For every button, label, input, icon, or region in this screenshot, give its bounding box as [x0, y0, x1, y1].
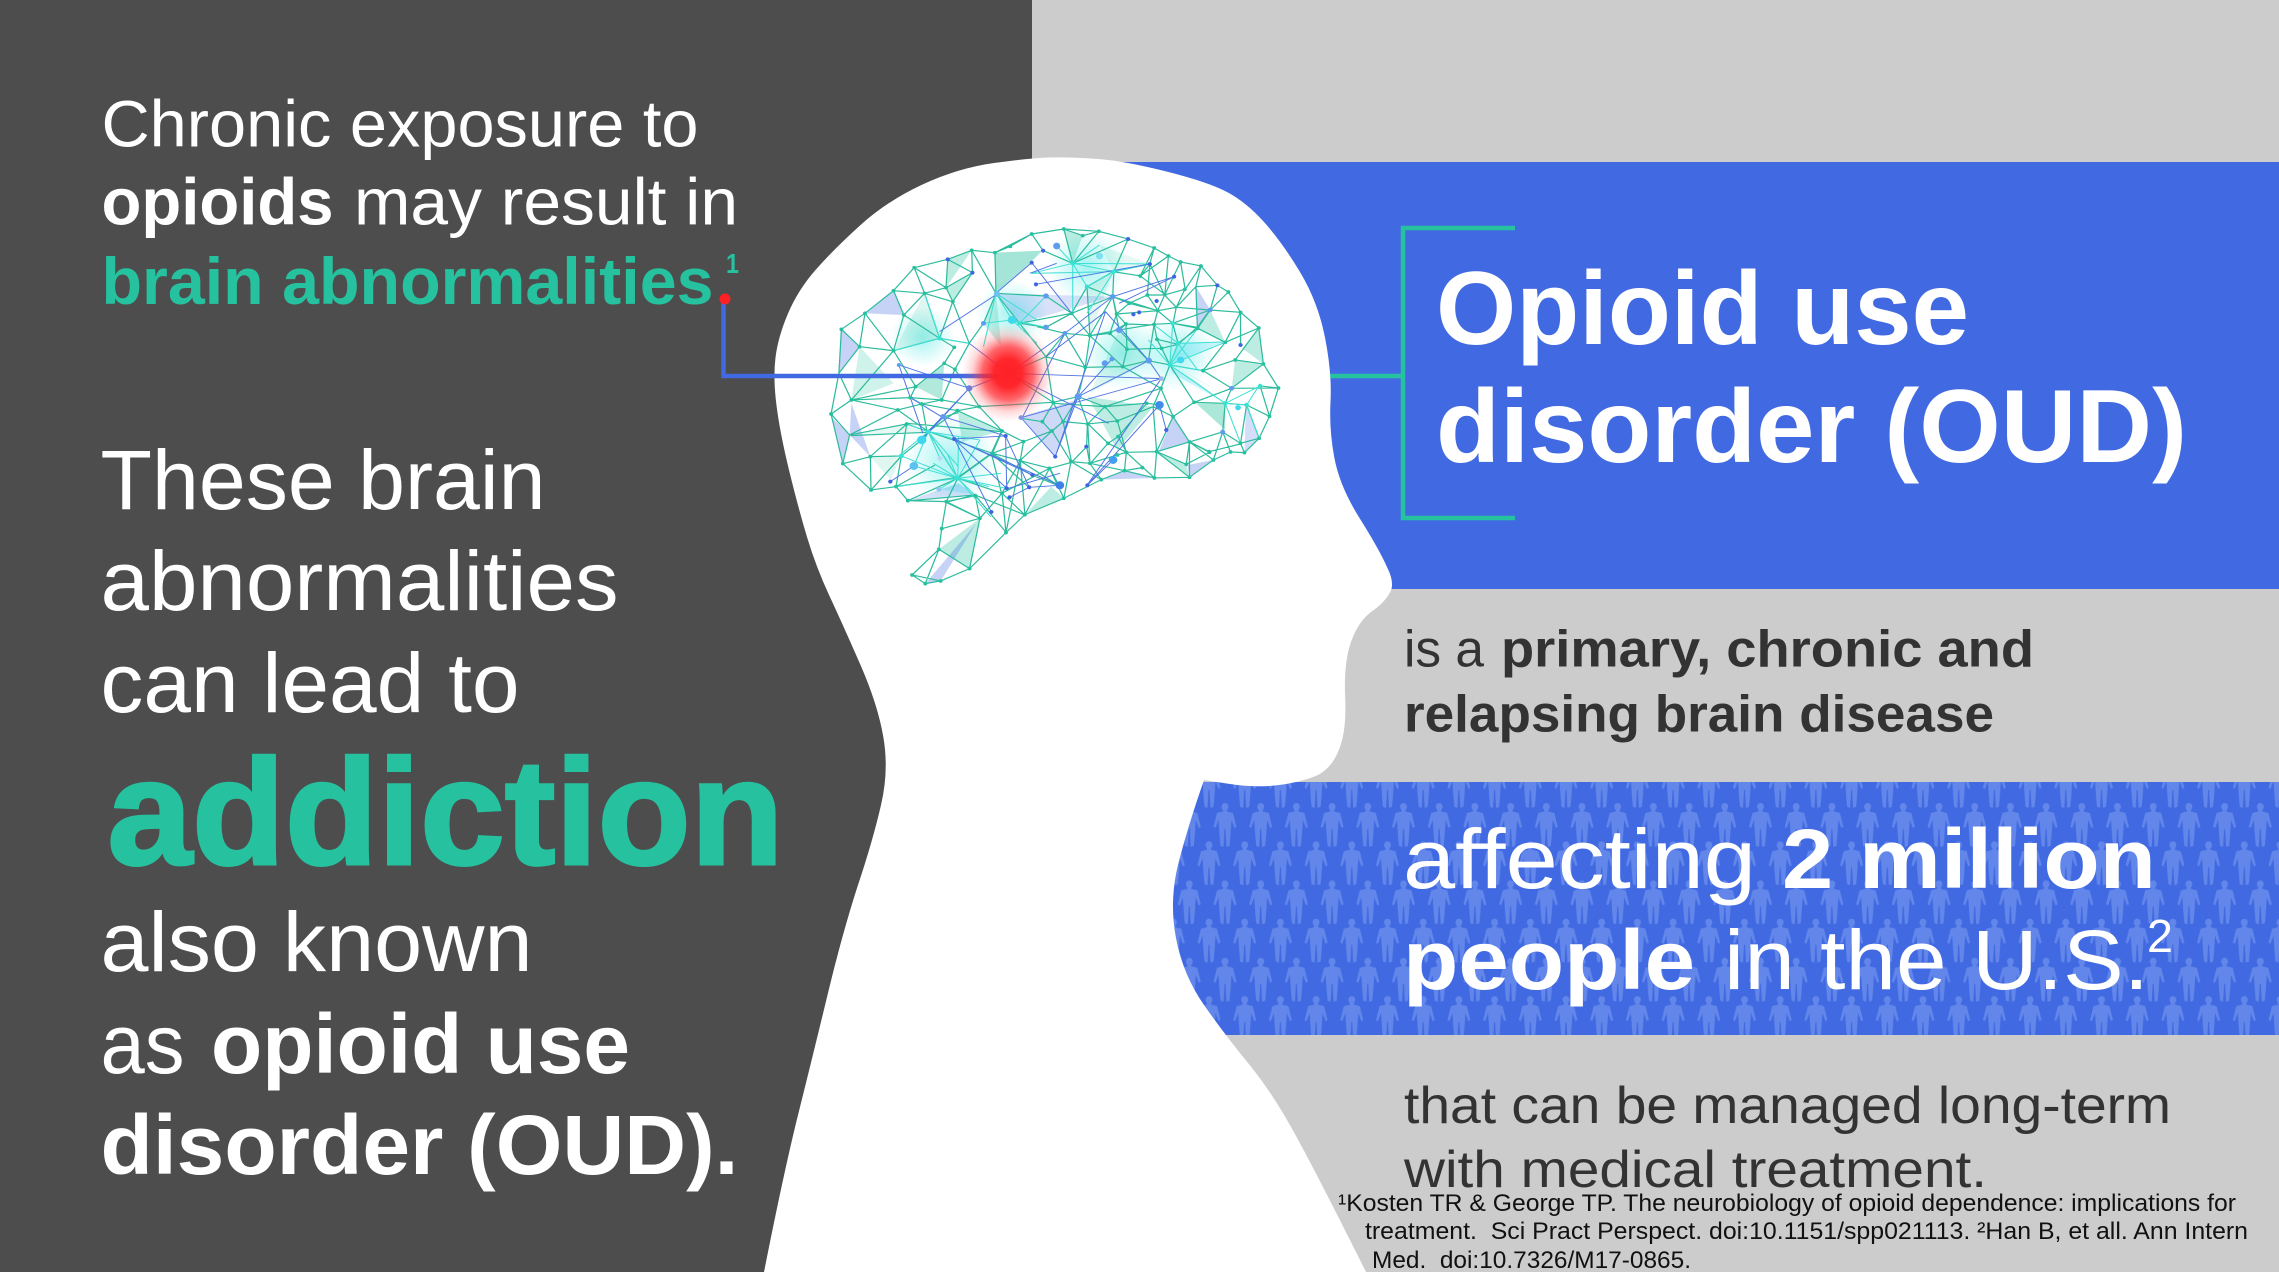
text block: long-term management — [1403, 1077, 2171, 1199]
text block: 2 million people: 2 million — [1782, 812, 2156, 906]
text block: primary chronic disease — [1404, 620, 2034, 744]
brain: teal mesh lines — [831, 229, 1278, 584]
head silhouette — [764, 157, 1392, 1272]
text block: 2 million people: 2 — [2147, 910, 2173, 962]
text block: addiction statement: as — [100, 997, 184, 1091]
text block: 2 million people: people — [1403, 913, 1695, 1007]
text block: addiction statement: disorder (OUD). — [100, 1098, 738, 1192]
brain: translucent teal facets — [851, 229, 1263, 569]
heading: Opioid use disorder: disorder (OUD) — [1436, 369, 2187, 485]
footnote references: ¹Kosten TR & George TP. The neurobiology of opioid dependence: implications for — [1338, 1190, 2236, 1217]
brain: translucent blue facets — [831, 287, 1259, 584]
brain: larger light blue nodes — [897, 243, 1241, 492]
text block: primary chronic disease: primary, chronic and — [1501, 620, 2034, 678]
callout dot — [720, 294, 730, 304]
callout line from text to brain hotspot — [724, 299, 1000, 376]
text block: long-term management: that can be managed long-term — [1404, 1077, 2171, 1135]
text block: addiction statement: can lead to — [100, 636, 520, 730]
heading: Opioid use disorder: Opioid use — [1436, 251, 1969, 367]
text block: primary chronic disease: is a — [1404, 620, 1484, 678]
panel: dark left background — [0, 0, 1032, 1272]
text block: chronic exposure: brain abnormalities — [102, 244, 714, 318]
text block: chronic exposure: 1 — [726, 248, 739, 279]
brain: small dark blue nodes — [890, 239, 1241, 512]
footnote references — [1338, 1190, 2248, 1272]
text block: long-term management: with medical treatment. — [1403, 1141, 1987, 1199]
text block: chronic exposure: opioids — [102, 164, 334, 238]
brain: translucent cyan facets — [939, 342, 1225, 495]
text block: 2 million people: in the U.S. — [1724, 913, 2149, 1007]
brain network illustration — [831, 229, 1278, 584]
text block: addiction statement — [100, 433, 783, 1192]
footnote references: treatment. Sci Pract Perspect. doi:10.1151/spp021113. ²Han B, et all. Ann Intern — [1365, 1218, 2248, 1245]
panel: grey right background — [1032, 0, 2279, 1272]
text block: addiction statement: These brain — [100, 433, 546, 527]
text block: 2 million people: affecting — [1403, 812, 1756, 906]
text block: chronic exposure: Chronic exposure to — [102, 86, 698, 160]
brain: cyan nodes — [901, 263, 1260, 478]
brain: cyan mesh lines — [894, 245, 1260, 517]
text block: addiction statement: addiction — [108, 728, 783, 896]
text block: addiction statement: also known — [100, 895, 532, 989]
text block: chronic exposure: may result in — [354, 164, 738, 238]
panel: blue people-pattern band — [1100, 782, 2279, 1035]
text block: addiction statement: abnormalities — [100, 534, 618, 628]
brain: teal nodes — [831, 229, 1278, 584]
text block: addiction statement: opioid use — [211, 997, 630, 1091]
brain: soft cyan glow clusters — [891, 230, 1216, 503]
bracket: teal connector from head to title — [1325, 228, 1515, 518]
text block: 2 million people — [1403, 812, 2173, 1007]
panel: blue OUD title band — [1100, 162, 2279, 589]
heading: Opioid use disorder — [1436, 251, 2187, 485]
text block: primary chronic disease: relapsing brain disease — [1404, 686, 1994, 744]
brain: blue mesh lines — [890, 263, 1174, 512]
brain hotspot glow — [962, 324, 1054, 422]
text block: chronic exposure — [102, 86, 739, 318]
